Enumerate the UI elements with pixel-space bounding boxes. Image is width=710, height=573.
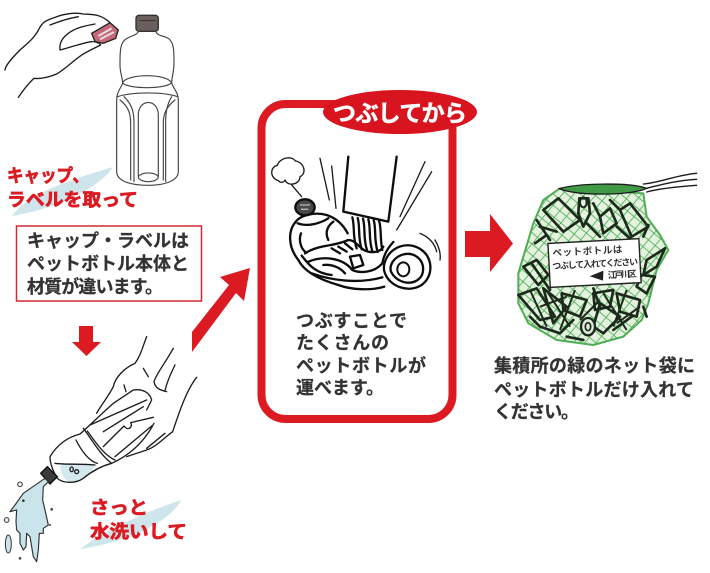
text: put only PET bottles in the green net — [494, 356, 695, 422]
swoosh: pale blue behind rinse heading — [80, 500, 181, 549]
note box: cap and label material — [16, 226, 202, 301]
badge: crush first — [323, 90, 477, 134]
drawstring — [559, 184, 647, 194]
illustration: PET bottle — [117, 15, 178, 185]
sign: bottles only on net: ペットボトルは — [552, 244, 623, 259]
crushed bottles inside net — [518, 197, 665, 340]
heading: remove cap and label: キャップ、 — [7, 166, 89, 186]
text: crushing makes many bottles portable: たくさんの — [296, 333, 389, 353]
text: put only PET bottles in the green net: ください。 — [494, 402, 579, 422]
note box: cap and label material: キャップ・ラベルは — [27, 231, 189, 251]
illustration: hands rinsing bottle — [41, 337, 197, 484]
arrow: to collection net — [465, 214, 513, 272]
icon: bottle cap in fingers — [92, 23, 118, 43]
illustration: green net bag — [518, 173, 697, 345]
heading: rinse quickly: さっと — [90, 498, 148, 518]
text: put only PET bottles in the green net: 集積所の緑のネット袋に — [494, 356, 695, 376]
heading: remove cap and label — [7, 166, 138, 210]
arrow: down to rinse step — [72, 326, 101, 356]
text: crushing makes many bottles portable — [296, 311, 426, 398]
sign: bottles only on net: つぶして入れてください — [552, 257, 638, 271]
net bag body — [518, 188, 668, 345]
text: crushing makes many bottles portable: 運べます。 — [296, 378, 384, 398]
illustration: steam puff and motion lines — [272, 157, 432, 230]
panel: crush first — [262, 90, 477, 419]
note box: cap and label material: ペットボトル本体と — [27, 254, 189, 274]
heading: rinse quickly: 水洗いして — [90, 522, 187, 542]
illustration: hand holding cap — [5, 13, 118, 97]
sign: bottles only on net — [548, 239, 641, 287]
note box: cap and label material: 材質が違います。 — [27, 276, 163, 297]
heading: rinse quickly — [90, 498, 187, 542]
text: crushing makes many bottles portable: ペットボトルが — [296, 355, 426, 376]
badge: crush first: つぶしてから — [333, 100, 467, 126]
icon: water stream — [4, 478, 53, 562]
arrow: diagonal to crush panel — [192, 268, 250, 352]
swoosh: pale blue behind cap heading — [12, 167, 113, 216]
illustration: foot crushing bottle — [290, 199, 440, 289]
sign: bottles only on net: 江戸川区 — [607, 268, 637, 280]
text: put only PET bottles in the green net: ペットボトルだけ入れて — [494, 380, 694, 400]
heading: remove cap and label: ラベルを取って — [7, 190, 138, 210]
text: crushing makes many bottles portable: つぶすことで — [296, 311, 407, 331]
